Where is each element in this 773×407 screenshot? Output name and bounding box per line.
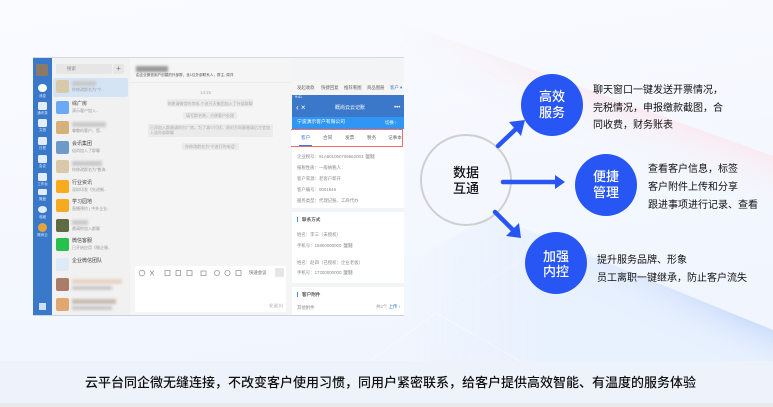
quick meeting label: 快速会议 [249,270,267,275]
contact 1 name: 姓名：李三（未授权） [297,232,341,237]
add button: + [116,64,121,73]
node: convenient management: 便捷 [593,169,619,184]
toolbar icons [138,270,242,276]
add button [113,64,124,74]
list item 2 [56,100,98,114]
application screenshot [33,57,404,316]
sidebar icon: bottom [39,303,46,310]
sidebar icon: meeting [38,155,47,168]
sidebar icon: contacts [37,102,48,115]
list item 9: 微信客服 [72,238,92,244]
list item 3 [56,121,107,134]
text: efficient service: 完税情况，申报缴款截图，合 [593,103,723,114]
chat header [130,58,292,83]
list item 3: 尊敬的客户，您.. [72,128,102,133]
sidebar icon: messages: 消息 [39,94,46,98]
list item 4: 仙尚加入了群聊 [72,148,100,153]
chat header: 由企业微信用户创建的外部群，含1位外部联系人，群主, 周洋 [136,73,233,77]
text: internal control: 员工离职一键继承，防止客户流失 [597,273,747,284]
list item 1: 你修改群名为"宁.. [72,87,104,92]
arrow to efficient service [498,120,525,146]
sidebar icon: workbench: 工作台 [37,182,48,186]
list item 8 [56,219,100,232]
gap band [292,208,404,212]
message bubble 1 [167,99,253,107]
text: efficient service: 同收费，财务账表 [593,120,673,131]
sidebar icon: settings [38,206,47,219]
list item 6 [56,179,106,193]
phone header: ‹ × [296,103,306,112]
list item 6: 行业资讯 [72,180,92,186]
message bubble 4: 你修改群名为"宁波打的电话" [185,144,236,149]
list item 7: 直播预约 | 中外企业.. [72,206,109,211]
node: internal control [525,232,587,294]
list item 7 [56,198,110,212]
message bubble 3: 已添加入群邀请你尔广房。为了减少打扰，周对方同意邀请后才会加入该外部群聊 [150,125,270,135]
node: efficient service: 高效 [539,89,565,104]
sidebar [33,58,52,316]
sidebar icon: micro drive [38,189,47,201]
node: convenient management: 管理 [593,185,619,200]
customer panel [291,58,404,316]
list item 1 [53,78,128,97]
node: efficient service [521,74,583,136]
chat pane [130,58,292,316]
node: efficient service: 服务 [539,104,565,120]
node: internal control: 加强 [543,249,569,264]
text: efficient service [593,84,723,131]
phone header: 9:41 [295,95,302,99]
central ring [420,134,512,226]
search box [56,64,112,74]
sidebar icon: settings: 收藏 [39,215,46,219]
phone header: 概尚云云记账 [335,105,365,111]
contact 2 name: 姓名：赵四（已授权：企业老板） [297,260,363,265]
conversation list [52,58,130,316]
contact heading: 联系方式 [302,217,320,222]
message bubble 1: 你邀请微信的李成-个进尺天集团加入了外部群聊 [167,100,253,106]
list item 6: 深圳印发《先进制.. [72,187,106,192]
sidebar icon: contacts: 通讯录 [37,111,48,115]
text: internal control [597,254,747,284]
sidebar icon: messages [38,84,47,98]
company bar: 宁波演示客户有限公司 [297,120,345,124]
message bubble 2 [183,112,237,119]
arrow to internal control [495,212,521,238]
highlighted tabs [289,129,403,147]
central label: 互通 [453,181,479,196]
list item 8: 邀请你加入群聊 [72,226,100,231]
arrows [492,120,565,238]
text: internal control: 提升服务品牌、形象 [597,255,687,266]
central label [453,165,479,196]
top tabs [291,81,404,95]
top tabs: 商品图册 [367,85,385,90]
sidebar icon: cloud: 概尚云 [37,233,48,237]
message bubble 4 [182,143,239,150]
sidebar icon: meeting: 会议 [39,164,46,168]
company bar [292,117,404,129]
central label: 数据 [453,165,479,180]
list item 4: 会讯集团 [72,141,92,147]
toolbar button [275,268,284,277]
send label: 发送(S) [269,303,283,308]
text: convenient management: 客户附件上传和分享 [648,182,738,193]
list item 9 [56,237,110,251]
list item 9: 已开始应用《微企服.. [72,245,110,250]
list item 7: 学习园地 [72,199,92,205]
message bubble 2: 填写群名称，方便客户处理 [186,113,234,118]
source row: 客户来源：老客户新开 [297,176,341,181]
attachments heading: 客户附件 [302,292,320,297]
node: convenient management [575,154,637,216]
input box [135,266,286,312]
gap band [292,283,404,287]
node: internal control: 内控 [543,264,569,279]
contact 2 phone: 手机号：17200000000 复制 [297,270,352,275]
other attachments row: 其他附件 [297,305,315,310]
sidebar icon: workbench [37,173,48,186]
service row: 服务类型：代理记账、工商代办 [297,198,358,203]
sidebar icon: micro drive: 微盘 [39,197,46,201]
text: convenient management: 跟进事项进行记录、查看 [648,200,758,211]
contact 1 phone: 手机号：15800000000 复制 [297,243,352,248]
company bar: 切换 › [385,120,396,124]
sidebar icon: docs: 文档 [39,128,46,132]
highlighted tabs: 客户 [301,135,310,140]
highlighted tabs: 合同 [323,135,332,140]
search box: 搜索 [67,66,76,71]
detail card [292,129,404,316]
list item 2: 演示客户加入.. [72,108,98,113]
bottom band [0,361,773,403]
sidebar icon: docs [38,119,47,132]
list item 5: 你修改群名为"售海.. [72,167,108,172]
phone header: ••• [394,105,400,111]
list item 10 [56,258,102,271]
bottom strip [0,403,773,407]
sidebar icon: cloud [37,223,48,237]
list item 12 [56,298,118,311]
top tabs: 发起收款 [297,85,315,90]
list item 11 [56,278,123,291]
text: efficient service: 聊天窗口一键发送开票情况， [593,85,723,96]
list item 2: 综广房 [72,101,87,107]
upload link: 共2个 上传 › [376,304,400,309]
highlighted tabs: 发票 [345,135,354,140]
background decoration [441,60,773,361]
top tabs: 快捷回复 [321,85,339,90]
sidebar icon: calendar: 日程 [39,146,46,150]
sidebar icon: calendar [38,137,47,150]
top tabs: 推荐看图 [344,85,362,90]
list item 10: 企业微信团队 [72,258,102,264]
user avatar [36,64,48,76]
phone header [292,95,404,117]
bottom summary text: 云平台同企微无缝连接，不改变客户使用习惯，同用户紧密联系，给客户提供高效智能、有温度的服务体验 [85,375,696,390]
highlighted tabs: 税务 [367,135,376,140]
text: convenient management: 查看客户信息，标签 [648,164,738,175]
text: convenient management [648,163,758,211]
list item 5 [56,160,108,173]
code row: 客户编号：0001946 [297,187,336,192]
chat timestamp: 14:15 [200,90,211,95]
list item 4 [56,140,100,154]
tax number row: 企业税号：91A801060709562003 复制 [297,154,374,159]
highlighted tabs: 记事本 [388,135,402,140]
tax type row: 报税性质：一般纳税人 [297,165,341,170]
top tabs: 客户 ▾ [390,85,402,90]
arrow to convenient management [503,175,565,189]
